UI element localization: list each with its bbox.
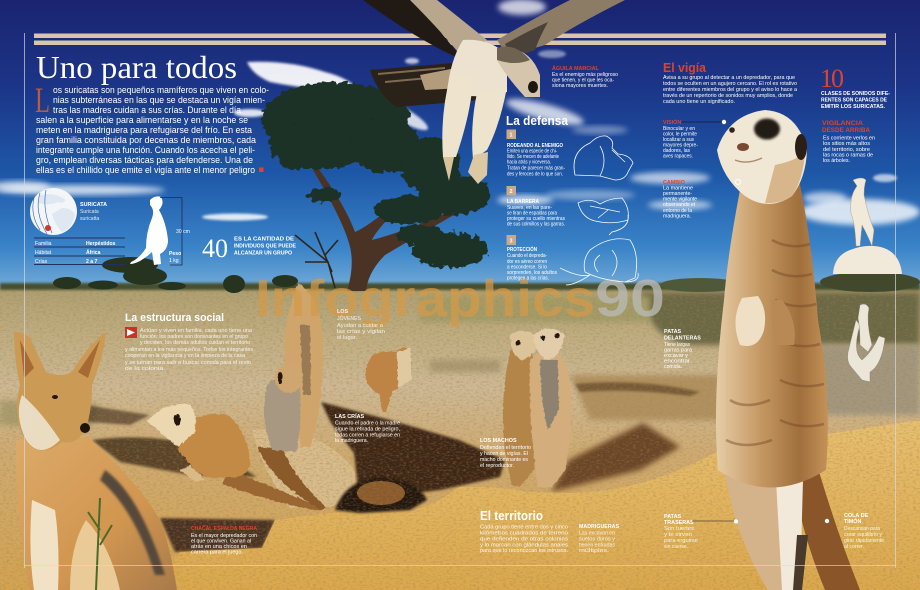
note: front legs: encontrar [664,358,690,364]
jackal [14,332,177,590]
intro text: integrante cumple una función. Cuando los acecha el peli- [36,144,255,155]
note: vision: localizar a sus [663,137,694,143]
note: vision: aves rapaces. [663,154,693,160]
data table [34,238,125,265]
note: helpers [337,309,385,341]
note: front legs: Tiene largas [664,342,690,348]
panel: social structure [125,312,253,372]
step 3: Cuando el depreda- [507,253,547,259]
note: the males: Defienden el territorio [480,445,531,451]
note: tail: Descansan para [844,526,880,532]
step 1: des y feroces de lo que son. [507,172,563,178]
note: watch from above: los árboles. [823,158,850,164]
eagle [363,0,625,184]
step 3: dor es aéreo corren [507,259,547,265]
note: black-backed jackal: Es el mayor depredador con [191,533,257,539]
note: burrows: suelos duros y [579,536,615,542]
note: helpers: LOS [337,309,348,315]
panel: social structure: La estructura social [125,312,224,324]
step 1 [506,130,565,178]
panel: territory: kilómetros cuadrados de terreno [480,530,568,536]
panel: sentinel: cada uno tiene un significado. [663,99,735,105]
note: black-backed jackal: el que conviven. Ganan al [191,538,251,544]
note: the males: macho dominante es [480,457,528,463]
note: tail: al correr. [844,544,864,550]
note: hind legs: PATAS [664,514,681,520]
icon: globe locator [30,188,77,235]
data table: 2 a 7 [86,259,97,265]
note: hind legs: y le sirven [664,532,692,538]
step 2: 2 [510,189,512,195]
intro text: nias subterráneas en las que se destaca un vigía mien- [53,94,265,105]
note: burrows: múltiples. [579,548,609,554]
data table: Crías [35,259,48,265]
step 2: Suaves, en las pare- [507,205,552,211]
data table: Familia [35,241,52,247]
line drawings: defence tactics [560,136,638,285]
note: the males: el reproductor. [480,463,514,469]
note: watch from above: las rocas o ramas de [823,152,873,158]
note: black-backed jackal: CHACAL ESPALDA NEGRA [191,526,257,532]
note: tail: TIMÓN [844,517,861,525]
note: posture: mente vigilante [663,196,697,202]
note: hind legs: sin caerse. [664,544,688,550]
illustration: meerkat on branch [848,304,885,382]
note: watch from above: los sitios más altos [823,141,870,147]
foreground dune [150,420,920,590]
note: front legs: excavar y [664,353,688,359]
top double bar [34,34,886,45]
panel: social structure: de la colonia. [125,366,165,372]
panel: territory: que defienden de otras colonias [480,536,569,542]
sand grain texture [0,288,920,590]
note: front legs: garras para [664,348,692,354]
stat: 10: CLASES DE SONIDOS DIFE- [821,91,890,97]
note: posture: entorno de la [663,208,692,214]
meerkat pair centre [503,328,571,487]
panel: territory: El territorio [480,508,543,523]
drawing: meerkats on their backs [578,198,628,235]
note: hind legs [664,514,738,550]
panel: sentinel: El vigía [663,60,707,75]
step 2 [506,186,565,228]
step 3 [506,235,557,282]
note: black-backed jackal: carrera para el juego. [191,550,243,556]
note: vision: Binocular y en [663,126,695,132]
panel: territory: Cada grupo tiene entre dos y cinco [480,524,568,530]
note: hind legs: para erguirse [664,538,698,544]
icon: meerkat silhouette with measures: Peso [169,251,181,257]
note: the young [335,412,400,444]
note: front legs [664,329,701,370]
meerkat lying [147,404,322,511]
stat: 40: ES LA CANTIDAD DE [234,236,294,242]
stat: 40: INDIVIDUOS QUE PUEDE [234,244,296,250]
step 1: Tratan de parecer más gran- [507,166,565,172]
note: front legs: comida. [664,364,682,370]
tree [261,82,491,291]
panel: social structure: Actúan y viven en familia, cada uno tiene una [140,328,252,334]
note: martial eagle: que tienen, y el que les oca- [552,78,614,84]
note: helpers: JÓVENES [337,315,362,322]
step 3: 3 [510,238,512,244]
note: vision: color, le permite [663,132,697,138]
stat: 10 [820,64,890,110]
note: the males [480,438,531,469]
step 2: LA BARRERA [507,199,539,205]
note: front legs: PATAS [664,329,681,335]
panel: territory: y lo marcan con glándulas anales [480,542,569,548]
clouds [0,0,920,225]
intro text [36,84,269,175]
step 3: protegen a las crías. [507,276,549,282]
meerkat crouching [264,363,303,452]
note: hind legs: TRASERAS [664,520,694,526]
stat: 10: EMITIR LOS SURICATAS. [821,104,885,110]
note: martial eagle: siona mayores muertes. [552,83,608,89]
note: watch from above [822,120,875,164]
note: the young: la madriguera. [335,438,368,444]
panel: social structure: y deciden, los demás adultos cuidan el territorio [140,340,250,346]
intro text: meten en la madriguera para refugiarse del frío. En esta [36,124,253,135]
note: helpers: las crías y vigilan [337,329,385,335]
note: watch from above: del territorio, sobre [823,147,870,153]
background photo: ground [0,288,920,590]
note: posture: La mantiene [663,186,693,192]
panel: social structure: y se turnan para salir a buscar comida para el resto [125,360,251,366]
small dead tree [295,232,338,288]
note: the young: LAS CRÍAS [335,412,364,420]
illustration: meerkat on mound [833,178,902,274]
species name: Suricata [80,209,99,215]
step 1: hacia atrás y viceversa. [507,160,551,166]
note: tail: COLA DE [844,513,868,519]
step 3: PROTECCIÓN [507,245,537,253]
stat: 40 [202,234,296,263]
intro text: tras las madres cuidan a sus crías. Durante el día [53,104,242,115]
note: the males: LOS MACHOS [480,438,517,444]
note: helpers: el lugar. [337,335,357,341]
watermark: Infographics [255,270,595,328]
step 3: sorprenden, los adultos [507,270,557,276]
stat: 40: 40 [202,234,228,263]
note: black-backed jackal [191,526,257,556]
note: watch from above: VIGILANCIA [822,120,864,127]
burrow [335,477,427,513]
note: watch from above: Es corriente verlos en [823,136,875,142]
icon: meerkat silhouette with measures: 30 cm [176,229,190,235]
stat: 40: ALCANZAR UN GRUPO [234,250,292,256]
step 1: Emiten una especie de chi- [507,148,557,154]
watermark: 90 [595,270,665,328]
note: hind legs: Son fuertes [664,526,695,532]
note: the young: todas corren a refugiarse en [335,432,400,438]
note: vision: dadores, las [663,148,690,154]
note: burrows: Las excavan en [579,530,615,536]
note: helpers: Ayudan a cuidar a [337,323,383,329]
intro text: ellas es el chillido que emite el vigía ante el menor peligro [36,164,255,175]
data table: Hábitat [35,250,52,256]
panel: sentinel: todos se oculten en un agujero cercano. El rol es rotativo [663,81,797,87]
step 1: RODEANDO AL ENEMIGO [507,143,563,149]
step 1: llido. Se mecen de adelante [507,154,559,160]
species name: suricatta [80,216,99,222]
note: tail [825,513,884,550]
icon: red arrow badge [125,327,137,338]
stat: 10: RENTES SON CAPACES DE [821,98,887,104]
intro text: gro, emplean diversas tácticas para defenderse. Una de [36,154,253,165]
note: martial eagle: ÁGUILA MARCIAL [552,65,600,72]
step 2: de sus colmillos y las garras. [507,222,565,228]
note: posture: CAMBIO [663,180,685,186]
intro text: gran familia constituida por decenas de miembros, cada [36,134,257,145]
note: posture: permanente- [663,191,692,197]
note: vision: VISIÓN [663,118,681,126]
note: watch from above: DESDE ARRIBA [822,127,870,134]
intro text: salen a la superficie para alimentarse y en la noche se [36,114,248,125]
stat: 10: 10 [820,64,844,93]
species name: SURICATA [80,202,107,208]
note: posture: madriguera. [663,214,691,220]
note: burrows: tienen entradas [579,542,615,548]
panel: defence [506,113,569,282]
meerkat tall, back turned [257,283,326,510]
drawing: adults protecting pups [560,239,638,285]
icon: meerkat silhouette with measures [130,196,190,265]
note: tail: girar rápidamente [844,538,884,544]
drop cap: L [35,80,50,120]
panel: social structure: y alimentan a los más pequeños. Todos los integrantes [125,347,253,353]
step 1: 1 [510,132,512,138]
step 2: proteger su cuello mientras [507,216,565,222]
note: burrows: MADRIGUERAS [579,524,619,530]
note: front legs: DELANTERAS [664,336,701,342]
note: posture [663,180,697,220]
panel: territory [480,508,569,554]
panel: defence: La defensa [506,113,569,128]
horizon bushes [0,257,920,293]
plant [88,498,112,590]
panel: sentinel: través de un repertorio de sonidos muy amplios, donde [663,93,793,99]
ground shadows [85,402,680,552]
panel: sentinel [663,60,797,105]
panel: sentinel: entre diferentes miembros del grupo y el aviso lo hace a [663,87,797,93]
note: black-backed jackal: atrás en una chicos en [191,544,247,550]
note: burrows [579,524,619,554]
note: the young: Cuando el padre o la madre [335,420,400,426]
meerkat small [365,348,411,412]
step 2: se tiran de espaldas para [507,210,557,216]
note: posture: observando el [663,202,695,208]
icon: meerkat silhouette with measures: 1 kg [169,258,179,264]
panel: social structure: cooperan en la vigilancia y en la limpieza de la casa [125,353,245,359]
background photo: sky [0,0,920,292]
title: Uno para todos [36,49,237,85]
note: martial eagle [552,65,618,89]
note: vision: mayores depre- [663,142,698,148]
big meerkat sentinel [716,110,860,590]
panel: territory: para que lo reconozcan los intrusos. [480,548,568,554]
note: the males: y hacen de vigías. El [480,451,528,457]
panel: sentinel: Avisa a su grupo al detectar a un depredador, para que [663,75,795,81]
note: the young: sigue la retirada de peligro, [335,426,400,432]
data table: África [86,249,101,256]
drawing: meerkats rearing up [574,136,633,180]
intro text: os suricatas son pequeños mamíferos que viven en colo- [53,84,269,95]
note: tail: crear equilibrio y [844,532,882,538]
data table: Herpéstidos [86,241,116,247]
note: martial eagle: Es el enemigo más peligroso [552,72,618,78]
step 3: a esconderse. Si lo [507,264,547,270]
panel: social structure: función: los padres son dominantes en el grupo [140,334,248,340]
species name [80,202,107,222]
note: vision [663,118,726,160]
